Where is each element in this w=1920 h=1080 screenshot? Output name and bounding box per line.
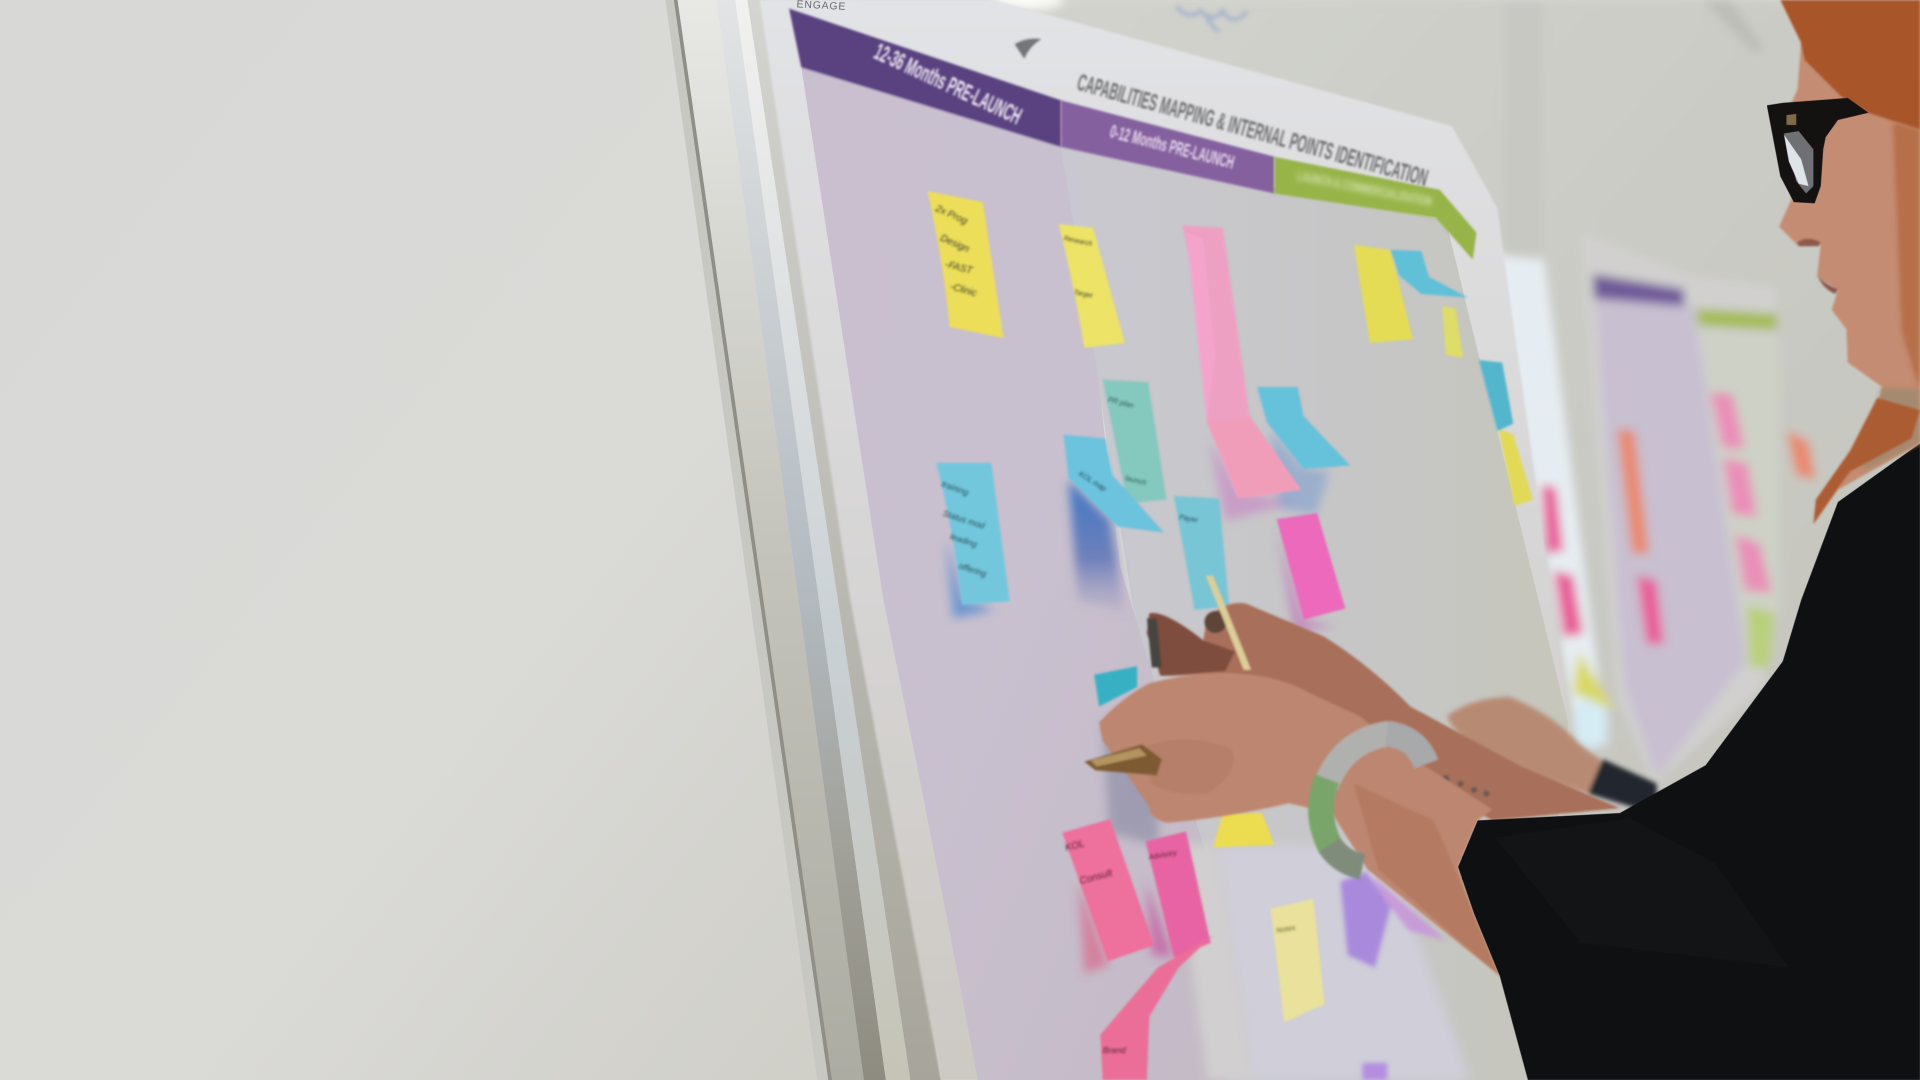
handwriting on sticky notes: Notes — [1276, 923, 1296, 935]
band: 12-36 months — [789, 9, 1061, 147]
pink tall sticky note — [1182, 225, 1301, 498]
woman's black blouse — [1458, 443, 1920, 1080]
band: 0-12 months: 0-12 Months PRE-LAUNCH — [1108, 121, 1236, 173]
jade bangle — [1321, 733, 1426, 867]
poster sheet — [760, 0, 1571, 1080]
handwriting on sticky notes: PR plan — [1107, 395, 1135, 410]
lower yellow and cream sticky notes — [1213, 813, 1325, 1022]
poster grey column — [1061, 147, 1568, 1080]
faint whiteboard marker writing — [1176, 6, 1247, 32]
handwriting on sticky notes: offering — [958, 561, 988, 579]
handwriting on sticky notes: launch — [1124, 473, 1147, 487]
poster lilac column — [801, 67, 1225, 1080]
poster logo mark — [1015, 39, 1041, 59]
handwriting on sticky notes — [933, 203, 1296, 1055]
poster sheet: CAPABILITIES MAPPING & INTERNAL POINTS IDENTIFICATION — [1074, 69, 1431, 192]
handwriting on sticky notes: Consult — [1079, 867, 1115, 887]
yellow sticky notes — [928, 191, 1533, 506]
woman's far forearm and hand holding stick — [1147, 576, 1620, 820]
handwriting on sticky notes: Research — [1063, 235, 1093, 248]
handwriting on sticky notes: 2x Prog — [933, 203, 969, 227]
handwriting on sticky notes: Advisory — [1147, 848, 1179, 862]
handwriting on sticky notes: training — [940, 479, 970, 498]
band: launch: LAUNCH & COMMERCIALISATION — [1296, 168, 1433, 209]
handwriting on sticky notes: Design — [939, 233, 971, 255]
cyan and teal sticky notes — [936, 250, 1513, 707]
band: 0-12 months — [1061, 100, 1274, 193]
handwriting on sticky notes: Status mod — [942, 508, 986, 531]
board frame — [665, 0, 941, 1080]
background wall and far posters — [980, 0, 1920, 1080]
handwriting on sticky notes: -Clinic — [949, 281, 978, 299]
band: 12-36 months: 12-36 Months PRE-LAUNCH — [870, 39, 1026, 130]
handwriting on sticky notes: KOL map — [1077, 469, 1108, 493]
purple sticky note — [1340, 872, 1446, 1080]
gold ring — [1084, 744, 1162, 775]
handwriting on sticky notes: Payer — [1178, 512, 1199, 525]
woman's head and face — [1779, 0, 1920, 524]
handwriting on sticky notes: leading — [949, 531, 979, 549]
second participant hand — [1447, 697, 1657, 814]
handwriting on sticky notes: KOL — [1064, 838, 1086, 854]
sticky note shadows — [946, 429, 1336, 973]
handwriting on sticky notes: -FAST — [944, 259, 974, 277]
black glasses — [1767, 98, 1869, 203]
handwriting on sticky notes: Target — [1073, 289, 1094, 300]
handwriting on sticky notes: Brand — [1103, 1045, 1126, 1055]
magenta sticky notes — [1062, 513, 1345, 1080]
left blank wall — [0, 0, 858, 1080]
band: launch — [1274, 157, 1476, 260]
woman's near arm and hand — [1099, 673, 1500, 976]
